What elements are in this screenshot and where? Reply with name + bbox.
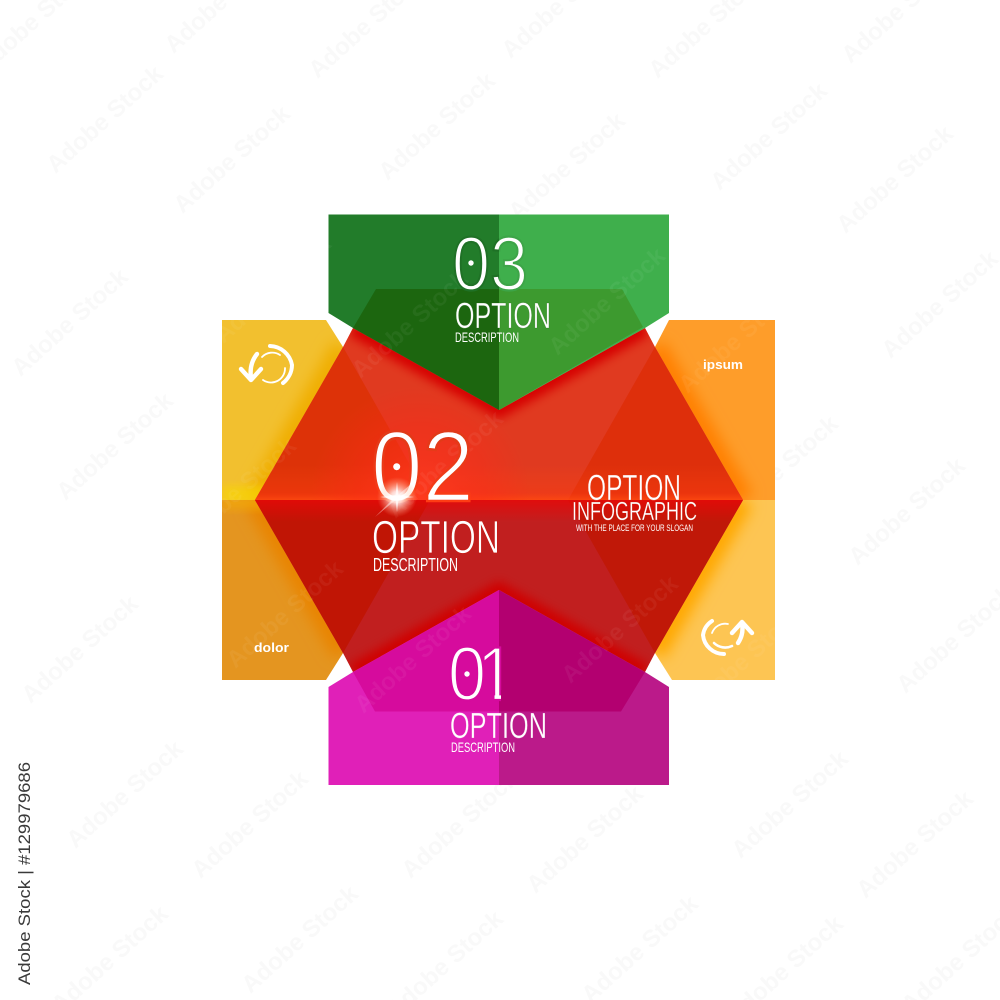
- watermark pattern: Adobe Stock: [503, 107, 631, 226]
- watermark pattern: Adobe Stock: [876, 245, 1000, 364]
- watermark over panels: Adobe Stock: [221, 555, 349, 674]
- watermark pattern: Adobe Stock: [843, 452, 971, 571]
- watermark over panels: Adobe Stock: [346, 265, 474, 384]
- watermark over panels: Adobe Stock: [556, 570, 684, 689]
- watermark pattern: Adobe Stock: [61, 735, 189, 854]
- panel: green top: [328, 214, 669, 410]
- watermark pattern: Adobe Stock: [716, 410, 844, 529]
- watermark over panels: Adobe Stock: [209, 230, 337, 349]
- section 02 text: [371, 411, 500, 575]
- section 03 text: 03: [452, 222, 528, 307]
- panel: central red upper half: [250, 328, 750, 500]
- panel: light orange lower right: [655, 500, 775, 680]
- section 03 text: [452, 222, 551, 345]
- watermark pattern: Adobe Stock: [186, 765, 314, 884]
- section 03 text: DESCRIPTION: [455, 329, 519, 345]
- watermark over panels: Adobe Stock: [381, 405, 509, 524]
- watermark pattern: Adobe Stock: [726, 745, 854, 864]
- watermark pattern: Adobe Stock: [236, 880, 364, 999]
- slogan text block: INFOGRAPHIC: [572, 496, 697, 526]
- slogan text block: [572, 467, 697, 534]
- watermark pattern: Adobe Stock: [851, 785, 979, 904]
- slogan text block: WITH THE PLACE FOR YOUR SLOGAN: [576, 523, 693, 534]
- section 01 text: [451, 646, 545, 752]
- icon: cycle arrow down: [241, 346, 292, 383]
- section 01 text: OPTION: [450, 705, 547, 746]
- panel: yellow upper left: [222, 320, 343, 504]
- watermark over panels: Adobe Stock: [673, 280, 801, 399]
- stock id credit: Adobe Stock | #129979686: [15, 762, 34, 985]
- watermark pattern: Adobe Stock: [16, 590, 144, 709]
- panel: magenta bottom: [328, 590, 669, 785]
- section 01 text: 0: [448, 632, 486, 717]
- panel: amber lower left: [222, 496, 343, 680]
- section 01 text: 1: [477, 632, 515, 717]
- panel: orange upper right: [655, 320, 775, 500]
- lens flare: [375, 477, 418, 517]
- watermark over panels: Adobe Stock: [543, 242, 671, 361]
- label: dolor: dolor: [254, 640, 289, 655]
- watermark pattern: Adobe Stock: [831, 120, 959, 239]
- watermark over panels: Adobe Stock: [349, 600, 477, 719]
- watermark pattern: Adobe Stock: [705, 77, 833, 196]
- watermark pattern: Adobe Stock: [396, 765, 524, 884]
- watermark over panels: Adobe Stock: [681, 600, 809, 719]
- icon: cycle arrow up: [703, 621, 752, 654]
- section 01 text: DESCRIPTION: [451, 739, 515, 755]
- watermark pattern: Adobe Stock: [168, 100, 296, 219]
- watermark over panels: [174, 230, 809, 719]
- section 02 text: OPTION: [372, 511, 500, 563]
- section 02 text: DESCRIPTION: [373, 555, 458, 575]
- slogan text block: OPTION: [587, 467, 681, 508]
- watermark over panels: Adobe Stock: [174, 432, 302, 551]
- watermark pattern: Adobe Stock: [51, 387, 179, 506]
- section 03 text: OPTION: [455, 295, 551, 336]
- panel: central red lower half: [250, 500, 750, 672]
- watermark pattern: Adobe Stock: [6, 263, 134, 382]
- section 02 text: 02: [371, 411, 474, 523]
- watermark pattern: Adobe Stock: [41, 60, 169, 179]
- label: ipsum: ipsum: [703, 357, 743, 372]
- watermark pattern: Adobe Stock: [373, 67, 501, 186]
- watermark pattern: Adobe Stock: [521, 780, 649, 899]
